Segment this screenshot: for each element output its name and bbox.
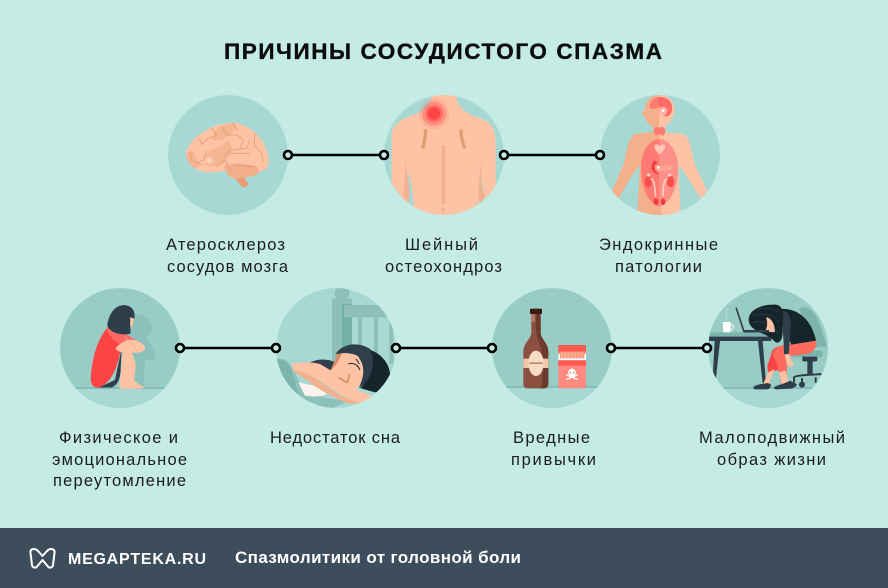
- label: overwork: переутомление: [53, 472, 186, 490]
- icon: woman at desk: [708, 288, 828, 408]
- label: cervical osteochondrosis: [385, 236, 502, 276]
- label: endocrine pathologies: патологии: [615, 258, 702, 276]
- label: overwork: Физическое и: [59, 429, 178, 447]
- connector: sleep to habits: [392, 344, 496, 352]
- label: sedentary lifestyle: образ жизни: [717, 451, 826, 469]
- connector: habits to desk: [607, 344, 711, 352]
- icon: sleeping woman: [276, 286, 401, 409]
- icon: logo: [30, 549, 55, 568]
- footer band: [0, 528, 888, 588]
- label: overwork: эмоциональное: [52, 451, 187, 469]
- title: ПРИЧИНЫ СОСУДИСТОГО СПАЗМА: [224, 39, 662, 64]
- label: atherosclerosis: Атеросклероз: [166, 236, 285, 254]
- footer caption: Спазмолитики от головной боли: [235, 548, 521, 567]
- icon: endocrine system: [600, 95, 720, 215]
- label: endocrine pathologies: [599, 236, 718, 276]
- icon: neck pain: [384, 93, 504, 220]
- label: sedentary lifestyle: Малоподвижный: [699, 429, 845, 447]
- label: cervical osteochondrosis: Шейный: [405, 236, 478, 254]
- connector: neck to endocrine: [500, 151, 604, 159]
- label: sedentary lifestyle: [699, 429, 845, 469]
- label: bad habits: привычки: [511, 451, 596, 469]
- icon: brain: [168, 95, 288, 215]
- label: atherosclerosis: сосудов мозга: [167, 258, 289, 276]
- label: overwork: [52, 429, 187, 490]
- label: atherosclerosis: [166, 236, 289, 276]
- connector: girl to sleep: [176, 344, 280, 352]
- label: cervical osteochondrosis: остеохондроз: [385, 258, 502, 276]
- label: lack of sleep: Недостаток сна: [270, 429, 401, 447]
- brand name: MEGAPTEKA.RU: [68, 551, 206, 568]
- label: bad habits: Вредные: [513, 429, 590, 447]
- connector: brain to neck: [284, 151, 388, 159]
- icon: tired girl: [60, 288, 180, 408]
- label: bad habits: [511, 429, 596, 469]
- icon: bottle and cigarettes: [492, 288, 612, 408]
- label: endocrine pathologies: Эндокринные: [599, 236, 718, 254]
